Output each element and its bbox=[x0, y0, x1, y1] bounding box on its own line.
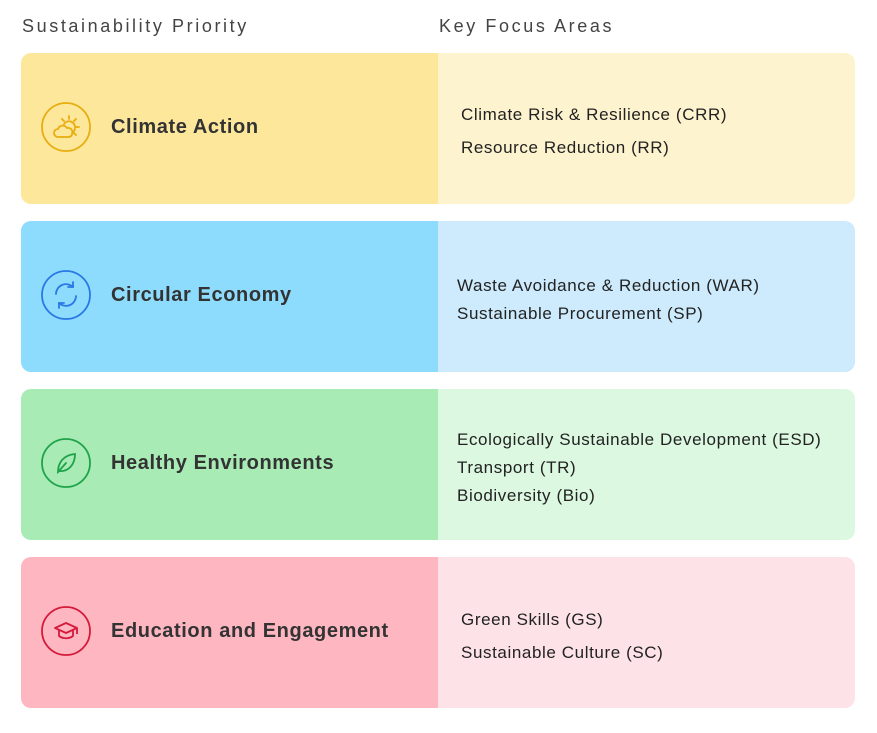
focus list: Sustainable Culture (SC) bbox=[461, 643, 663, 662]
title: Circular Economy bbox=[111, 284, 292, 306]
focus list: Biodiversity (Bio) bbox=[457, 486, 595, 505]
focus list bbox=[457, 430, 821, 505]
focus list: Climate Risk & Resilience (CRR) bbox=[461, 105, 727, 124]
title: Healthy Environments bbox=[111, 452, 334, 474]
title: Education and Engagement bbox=[111, 620, 389, 642]
icon: recycle arrows bbox=[41, 270, 91, 320]
focus list: Transport (TR) bbox=[457, 458, 576, 477]
panel: circular economy bbox=[21, 221, 855, 372]
focus list: Resource Reduction (RR) bbox=[461, 138, 669, 157]
focus list: Ecologically Sustainable Development (ESD) bbox=[457, 430, 821, 449]
focus list bbox=[461, 105, 727, 157]
panel: education and engagement bbox=[21, 557, 855, 708]
panel: climate action bbox=[21, 53, 855, 204]
focus list bbox=[457, 276, 760, 323]
icon: leaf bbox=[41, 438, 91, 488]
title: Climate Action bbox=[111, 116, 259, 138]
icon: sun cloud bbox=[41, 102, 91, 152]
focus list: Waste Avoidance & Reduction (WAR) bbox=[457, 276, 760, 295]
icon: graduation cap bbox=[41, 606, 91, 656]
focus list: Sustainable Procurement (SP) bbox=[457, 304, 703, 323]
focus list: Green Skills (GS) bbox=[461, 610, 603, 629]
panel: healthy environments bbox=[21, 389, 855, 540]
header: focus areas: Key Focus Areas bbox=[439, 16, 614, 36]
header: priority: Sustainability Priority bbox=[22, 16, 249, 36]
focus list bbox=[461, 610, 663, 662]
